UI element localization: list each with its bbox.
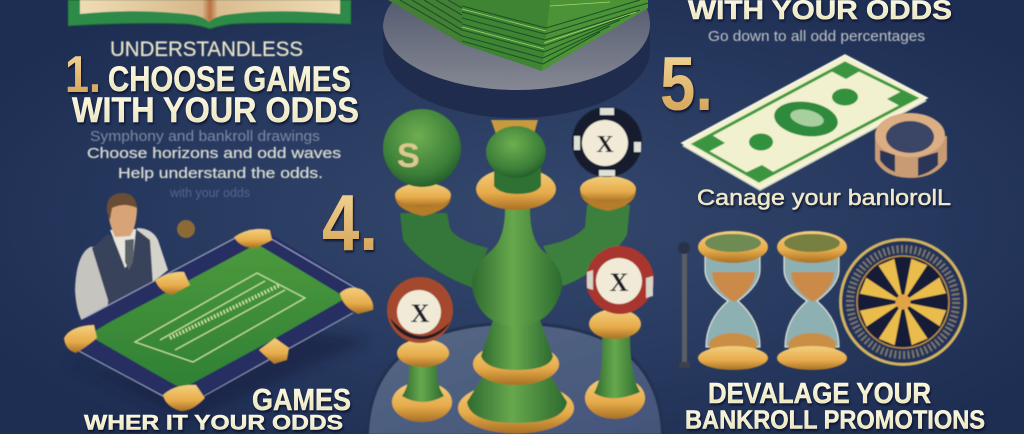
step 1 heading line 2: WITH YOUR ODDS: [72, 91, 359, 130]
left column base: [392, 382, 452, 422]
ring pattern: [850, 249, 956, 355]
black chip ball: [572, 107, 642, 211]
step 5 number: 5.: [660, 42, 713, 127]
dealer collar: [110, 229, 136, 268]
mid gold collar: [473, 343, 559, 385]
red sphere: [586, 246, 654, 314]
step 1 kicker: UNDERSTANDLESS: [110, 38, 303, 61]
chip side blocks: [880, 150, 938, 176]
dealer left sleeve: [75, 245, 110, 321]
white face: [596, 258, 642, 304]
bill green border: [694, 63, 916, 181]
left column cap: [397, 339, 449, 367]
top opening: [784, 234, 840, 252]
dealer hair: [107, 193, 137, 220]
floating coin: [177, 220, 195, 238]
trophy column: [458, 120, 574, 434]
upper skirt: [481, 320, 553, 370]
icon: hourglass one: [698, 231, 768, 370]
right red ball: [585, 246, 654, 419]
dollar letter: S: [397, 137, 420, 175]
right column cap: [589, 309, 641, 339]
left arm: [400, 213, 488, 288]
caption line 2: WHER IT YOUR ODDS: [84, 412, 343, 434]
step 1 heading line 1: CHOOSE GAMES: [108, 60, 351, 99]
top rim: [698, 231, 768, 263]
glass: [705, 257, 760, 347]
rail highlights: [79, 230, 357, 401]
icon: dollar bill: [682, 55, 927, 191]
step 4 number: 4.: [322, 178, 378, 267]
bulb body: [472, 208, 562, 326]
chip side: [875, 136, 947, 178]
white face: [397, 290, 441, 334]
dealer head: [108, 194, 137, 237]
glass: [784, 257, 839, 347]
icon: poker chip: [875, 113, 947, 178]
table rails: [83, 238, 351, 394]
top opening: [705, 234, 761, 252]
step 1 number: 1.: [65, 46, 101, 104]
bill shadow edge: [682, 58, 927, 191]
right column base: [585, 377, 645, 419]
neck: [494, 168, 541, 194]
bill corner ornaments: [694, 63, 916, 181]
caption: manage your bankroll: Canage your banlorolL: [697, 185, 951, 210]
top gold collar: [476, 168, 556, 210]
dealer tie: [125, 239, 134, 270]
step 1 description: [87, 128, 341, 200]
step subtext: Go down to all odd percentages: [708, 28, 925, 45]
top cap: [491, 120, 538, 134]
dealer right sleeve: [135, 228, 168, 285]
bill small seals: [832, 88, 858, 106]
panel: step 4 caption: [84, 382, 351, 434]
dealer: [75, 193, 168, 321]
lower gold base: [458, 382, 574, 434]
step 1 description: Symphony and bankroll drawings: [90, 128, 320, 145]
stick: [678, 242, 690, 368]
wheel ring: [842, 241, 964, 363]
table markings: [135, 273, 305, 362]
icon: prize wheel: [839, 238, 967, 366]
red and dark sphere: [387, 277, 453, 343]
face glyph: X: [596, 132, 614, 158]
lower green foot: [467, 370, 567, 423]
green dollar ball: [383, 109, 461, 216]
right arm: [543, 205, 630, 286]
panel: top-centre money stack on plate: [383, 0, 650, 118]
bill portrait: [772, 98, 840, 140]
bottom plate: [366, 322, 664, 434]
table felt: [88, 240, 352, 394]
white face: [582, 120, 628, 166]
plate rim: [383, 25, 650, 118]
left column stem: [402, 365, 444, 402]
money stack: [388, 0, 648, 71]
chip markers: [574, 108, 641, 176]
right column stem: [594, 335, 640, 398]
lower sand: [788, 333, 836, 357]
chip centre: [886, 121, 934, 153]
panel: dealer and gaming table: [64, 193, 373, 420]
chip top: [875, 113, 945, 157]
lower sand: [709, 333, 757, 357]
face glyph: X: [411, 299, 430, 328]
icon: hourglass two: [777, 231, 847, 370]
top rim: [777, 231, 847, 263]
step 1 description: Choose horizons and odd waves: [87, 145, 341, 162]
wheel gold rim: [839, 238, 967, 366]
bill face: [682, 55, 927, 188]
panel: central trophy with balls: [366, 107, 664, 434]
step 1 description: with your odds: [169, 185, 250, 200]
caption line 1: DEVALAGE YOUR: [708, 378, 931, 410]
wheel hub: [896, 294, 910, 310]
panel: step 3 caption: [685, 378, 985, 434]
side markers: [587, 270, 653, 298]
gaming table: [64, 229, 373, 411]
panel: step 5 top-right heading: [660, 0, 952, 127]
left red ball: [387, 277, 453, 422]
left gold cup: [395, 197, 451, 216]
table gold corner pieces: [64, 229, 373, 411]
dark sphere: [572, 107, 642, 177]
dealer vest: [92, 229, 153, 312]
caption line 1: GAMES: [252, 382, 351, 417]
book pages: [80, 0, 340, 22]
upper sand: [791, 272, 834, 302]
caption line 2: BANKROLL PROMOTIONS: [685, 404, 985, 434]
panel: time and promotion icons: [678, 231, 967, 370]
step 1 description: Help understand the odds.: [118, 165, 323, 182]
book cover: [68, 0, 351, 29]
green sphere: [383, 109, 461, 187]
plate surface: [383, 0, 650, 90]
base: [698, 346, 768, 370]
wheel inner gold line: [857, 256, 949, 348]
panel: step 1 text: [65, 38, 359, 200]
right gold cup: [580, 192, 636, 211]
upper sand: [712, 272, 755, 302]
panel: open book illustration: [68, 0, 351, 29]
top green ball: [486, 126, 546, 178]
table shadow: [65, 330, 370, 420]
face glyph: X: [610, 268, 629, 297]
wheel wedges: [851, 250, 955, 354]
base: [777, 346, 847, 370]
